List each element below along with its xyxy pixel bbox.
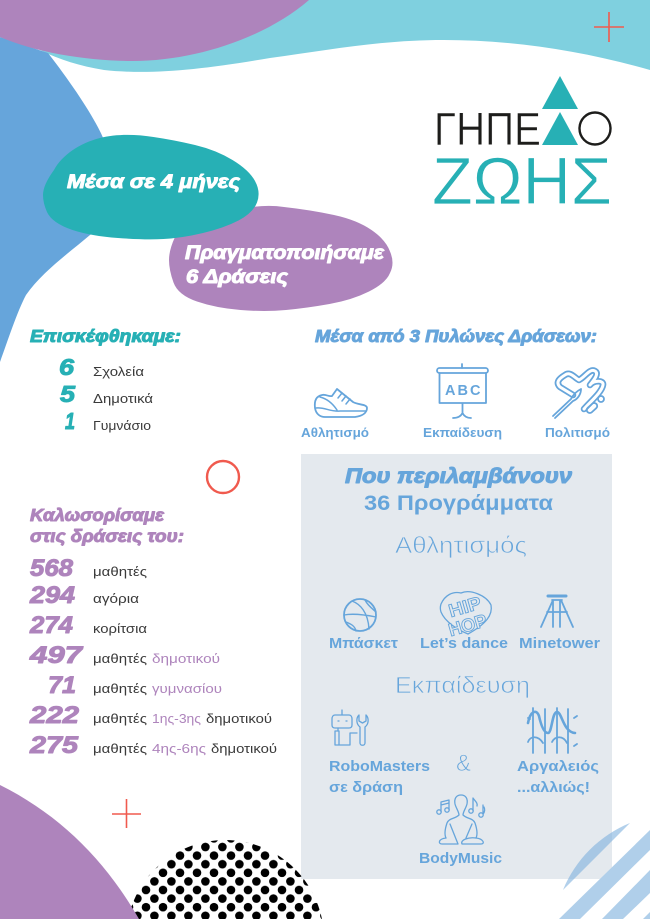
logo triangle middle — [542, 112, 578, 145]
heading: welcomed — [30, 505, 184, 546]
stats: students: δημοτικού — [152, 651, 220, 666]
stats: schools — [59, 354, 154, 434]
stats: schools: Δημοτικά — [93, 391, 154, 406]
stats: students: 497 — [29, 642, 84, 669]
background shape: blue side blob — [0, 37, 112, 362]
heading: welcomed: Καλωσορίσαμε — [30, 505, 165, 525]
stats: students: μαθητές — [93, 711, 147, 726]
icon: running shoe — [315, 389, 367, 417]
callout: purple blob — [169, 206, 392, 311]
icon: ABC presentation board — [437, 364, 488, 418]
stats: students: μαθητές — [93, 651, 147, 666]
stats: students — [29, 555, 277, 759]
icon: basketball — [344, 599, 376, 631]
section title: education: Εκπαίδευση — [395, 672, 530, 698]
panel heading: Που περιλαμβάνουν — [345, 465, 572, 488]
icon: robot with wrench — [332, 710, 368, 745]
callout text: Μέσα σε 4 μήνες — [67, 172, 241, 193]
label: loom: Αργαλειός — [517, 759, 599, 775]
logo word: first line: ΓΗΠΕ — [434, 103, 541, 155]
ampersand: & — [456, 750, 471, 777]
stats: students: μαθητές — [93, 681, 147, 696]
label: loom — [517, 759, 599, 796]
icon: red plus bottom left — [112, 799, 141, 828]
panel subheading: 36 Προγράμματα — [364, 492, 553, 515]
stats: students: 275 — [29, 732, 79, 759]
heading: visited: Επισκέφθηκαμε: — [30, 326, 181, 346]
stats: students: αγόρια — [93, 591, 140, 606]
panel: programmes — [301, 454, 612, 879]
icon: red circle — [207, 461, 239, 493]
decoration: blue stripes — [559, 830, 650, 919]
logo triangle top — [542, 76, 578, 109]
callout: purple blob: 6 Δράσεις — [186, 267, 289, 288]
icon: hip hop heart — [440, 592, 491, 640]
icon: ABC presentation board: ABC — [445, 383, 482, 399]
label: minetower: Minetower — [519, 636, 600, 652]
background shape: cyan wave — [40, 0, 650, 72]
stats: students: δημοτικού — [206, 711, 272, 726]
section title: sport: Αθλητισμός — [395, 532, 527, 558]
heading: welcomed: στις δράσεις του: — [30, 526, 184, 546]
icon: red plus top right — [594, 12, 624, 42]
label: robomasters: RoboMasters — [329, 759, 430, 775]
label: bodymusic: BodyMusic — [419, 851, 502, 867]
stats: students: μαθητές — [93, 741, 147, 756]
logo letter O — [580, 112, 610, 144]
stats: students: γυμνασίου — [152, 681, 222, 696]
icon: hip hop heart: HIP — [446, 593, 484, 621]
logo: Γήπεδο Ζωής — [432, 76, 612, 219]
stats: students: 568 — [30, 555, 74, 582]
stats: students: κορίτσια — [93, 621, 148, 636]
icon: mine tower — [541, 596, 573, 627]
stats: schools: 5 — [60, 381, 76, 407]
label: let's dance: Let’s dance — [420, 636, 508, 652]
decoration: dotted half circle — [132, 840, 322, 919]
stats: students: μαθητές — [93, 564, 147, 579]
stats: students: 222 — [29, 702, 80, 729]
label: sport: Αθλητισμό — [301, 426, 369, 440]
label: education: Εκπαίδευση — [423, 426, 502, 440]
stats: schools: 1 — [65, 408, 75, 434]
stats: students: 294 — [29, 582, 75, 609]
icon: hip hop heart: HOP — [446, 610, 489, 640]
stats: students: 274 — [29, 612, 73, 639]
heading: three pillars: Μέσα από 3 Πυλώνες Δράσεων: — [315, 326, 597, 346]
label: loom: ...αλλιώς! — [517, 780, 590, 796]
icon: painting brushes — [553, 370, 604, 418]
stats: schools: Σχολεία — [93, 364, 145, 379]
stats: schools: Γυμνάσιο — [93, 418, 151, 433]
stats: students: 1ης-3ης — [152, 711, 201, 726]
background shape: purple bottom-left blob — [0, 785, 139, 919]
label: basketball: Μπάσκετ — [329, 636, 399, 652]
label: culture: Πολιτισμό — [545, 426, 610, 440]
label: robomasters — [329, 759, 430, 796]
decoration: blue arc — [563, 823, 630, 890]
callout: teal blob — [43, 135, 259, 239]
stats: students: δημοτικού — [211, 741, 277, 756]
stats: students: 71 — [48, 672, 76, 699]
label: robomasters: σε δράση — [329, 780, 403, 796]
logo word: second line: ΖΩΗΣ — [432, 144, 612, 219]
background shape: purple top blob — [0, 0, 309, 61]
icon: loom — [528, 708, 577, 753]
stats: schools: 6 — [59, 354, 74, 380]
stats: students: 4ης-6ης — [152, 741, 206, 756]
callout text: Πραγματοποιήσαμε — [185, 243, 385, 264]
icon: person meditating with music notes — [437, 795, 485, 844]
